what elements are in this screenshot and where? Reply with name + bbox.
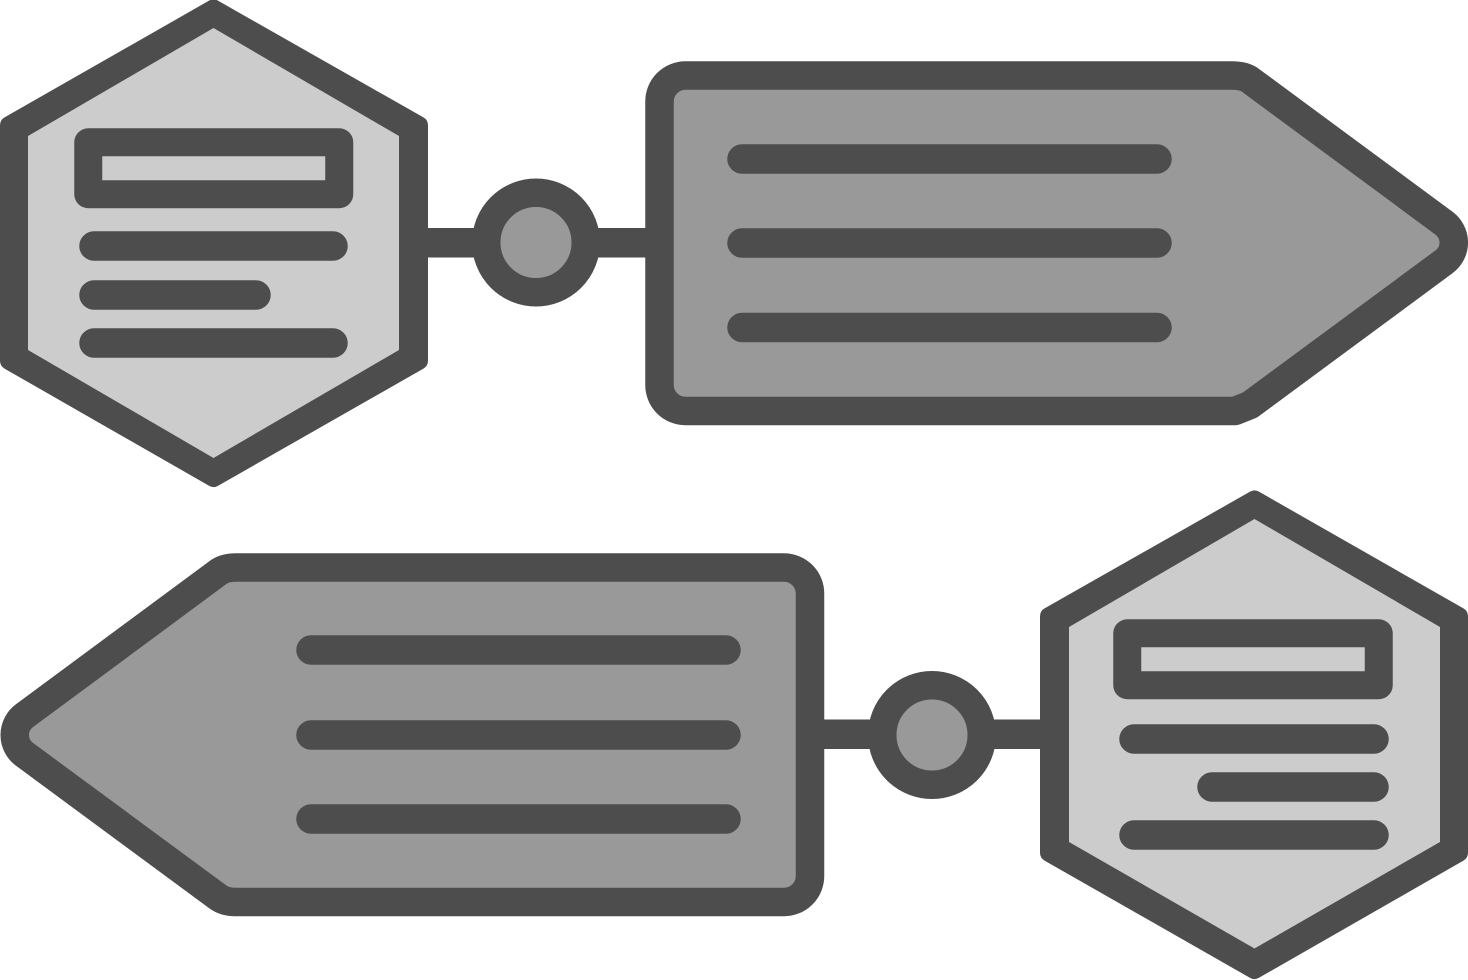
connector node top: [486, 193, 586, 292]
connector bottom: [815, 720, 1050, 749]
arrow text lines top-right: [742, 159, 1157, 328]
hexagon text lines top-left: [94, 246, 333, 343]
hexagon panel top-left: [9, 8, 419, 478]
connector top: [420, 228, 655, 258]
arrow text lines bottom-left: [311, 650, 726, 819]
connector node bottom: [882, 685, 982, 785]
hexagon panel bottom-right: [1049, 500, 1459, 970]
hexagon title box top-left: [88, 142, 339, 194]
hexagon text lines bottom-right: [1134, 739, 1374, 835]
hexagon title box bottom-right: [1127, 633, 1379, 685]
arrow panel top-right: [660, 76, 1454, 411]
arrow panel bottom-left: [15, 568, 810, 902]
